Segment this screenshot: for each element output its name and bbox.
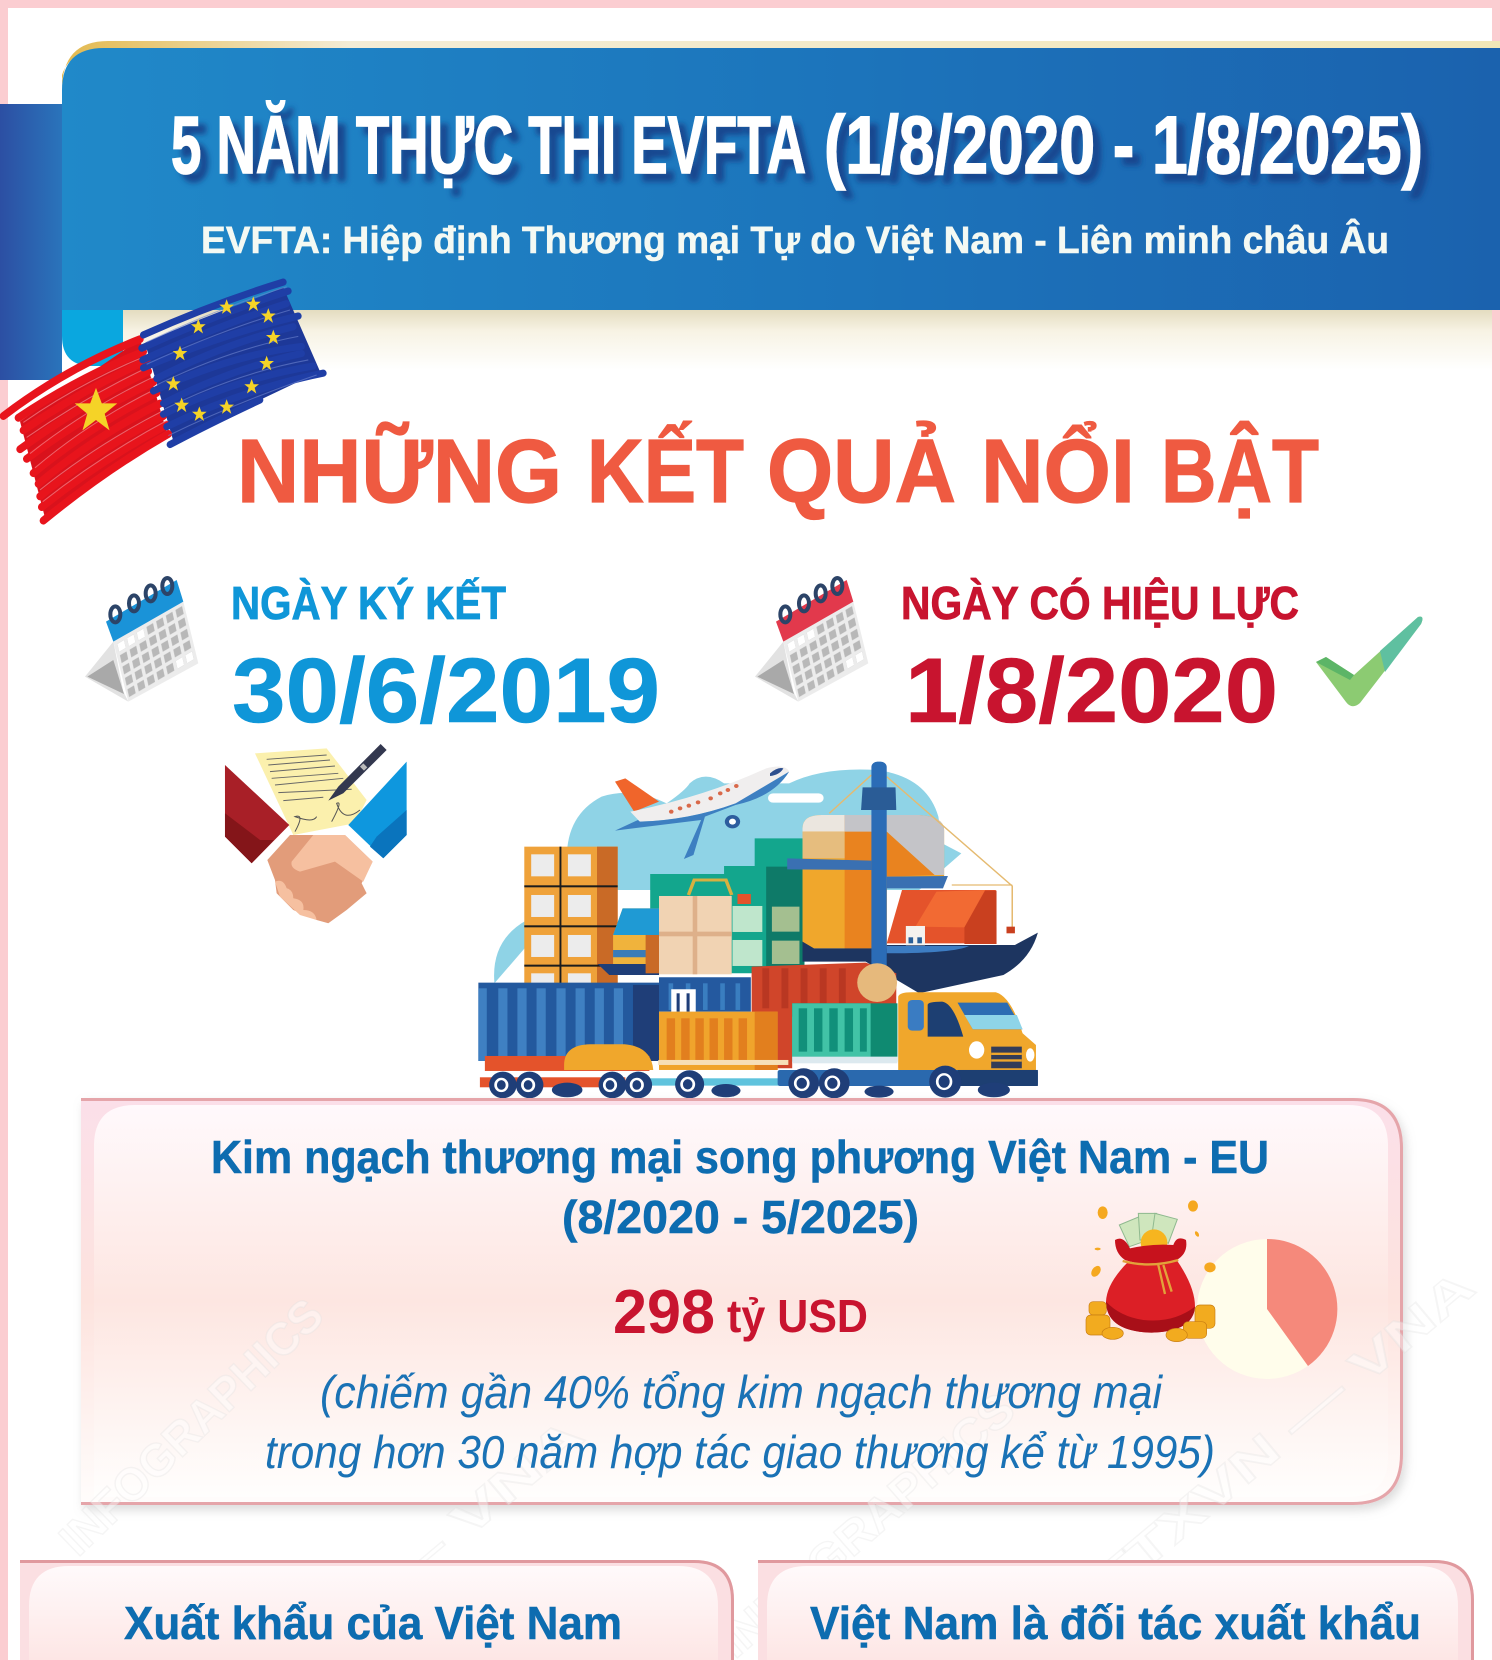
watermarks on panel: INFOGRAPHICS xyxy=(49,1288,333,1565)
header: cream glow xyxy=(123,310,1492,370)
panel frame xyxy=(20,1560,734,1660)
icon: handshake and signed agreement xyxy=(225,744,407,923)
panel period: (8/2020 - 5/2025) xyxy=(562,1191,919,1243)
main heading: QUẢ xyxy=(767,420,956,522)
teal containers xyxy=(650,838,804,973)
watermarks on panel: — VNA xyxy=(368,1407,593,1608)
sky xyxy=(494,769,961,983)
label: signing date: NGÀY KÝ KẾT xyxy=(231,577,506,629)
watermarks on panel: INFOGRAPHICS xyxy=(707,1382,1025,1660)
panel frame xyxy=(81,1098,1403,1505)
header: left band xyxy=(0,104,62,380)
header: gold top edge xyxy=(62,41,1500,90)
crane xyxy=(829,775,1012,930)
panel heading: Kim ngạch thương mại song phương Việt Nam - EU xyxy=(211,1131,1269,1183)
plane xyxy=(615,778,659,812)
value: signing date: 30/6/2019 xyxy=(232,640,660,742)
value: effective date: 1/8/2020 xyxy=(905,640,1278,742)
panel: Vietnam exports xyxy=(20,1560,734,1660)
label: effective date: NGÀY CÓ HIỆU LỰC xyxy=(901,577,1299,629)
panel frame xyxy=(758,1560,1474,1660)
icon: scribbled flags xyxy=(3,282,323,521)
subtitle: EVFTA: Hiệp định Thương mại Tự do Việt Nam - Liên minh châu Âu xyxy=(201,218,1389,262)
main heading xyxy=(237,420,1319,522)
panel inner xyxy=(94,1105,1388,1497)
note line 1: (chiếm gần 40% tổng kim ngạch thương mại xyxy=(320,1366,1164,1418)
pie chart: 40 percent share xyxy=(1197,1239,1337,1379)
panel border xyxy=(20,1562,732,1660)
blue containers xyxy=(659,977,751,1012)
main heading: KẾT xyxy=(587,420,744,522)
main heading: BẬT xyxy=(1161,420,1319,522)
icon: money bag with coins xyxy=(1086,1200,1216,1342)
panel inner xyxy=(767,1566,1458,1660)
icon: calendar red xyxy=(755,578,868,702)
value: 298 billion USD: 298 xyxy=(613,1278,715,1347)
title: 5 NĂM THỰC THI EVFTA xyxy=(171,100,806,191)
icon: check mark xyxy=(1316,617,1422,706)
note line 2: trong hơn 30 năm hợp tác giao thương kể từ 1995) xyxy=(265,1426,1215,1478)
box stack xyxy=(524,847,618,983)
truck xyxy=(898,992,1036,1070)
tall stacked cargo xyxy=(803,815,944,948)
ship xyxy=(803,933,1038,993)
watermarks on panel: TTXVN — VNA xyxy=(1083,1259,1484,1608)
value unit: tỷ USD xyxy=(727,1290,868,1342)
header: cyan corner xyxy=(62,310,123,366)
trailer xyxy=(658,1060,788,1065)
wheels xyxy=(489,1066,1010,1098)
panel border xyxy=(758,1562,1472,1660)
watermarks on panel xyxy=(49,1259,1484,1660)
cream carton xyxy=(659,896,732,974)
panel heading: Xuất khẩu của Việt Nam xyxy=(124,1597,622,1649)
header: blue banner xyxy=(62,48,1500,310)
panel: export partner xyxy=(758,1560,1474,1660)
panel border xyxy=(81,1100,1402,1504)
panel: bilateral trade turnover xyxy=(49,1098,1484,1660)
illustration: cargo logistics xyxy=(478,762,1038,1098)
small stacked cargo xyxy=(613,908,659,973)
red container xyxy=(752,963,896,1068)
panel heading: Việt Nam là đối tác xuất khẩu xyxy=(810,1597,1421,1649)
green container xyxy=(792,1003,897,1062)
panel inner xyxy=(29,1566,718,1660)
icon: calendar blue xyxy=(85,578,198,702)
main heading: NHỮNG xyxy=(237,421,562,522)
yellow container xyxy=(659,1012,778,1070)
main heading: NỔI xyxy=(981,420,1135,522)
